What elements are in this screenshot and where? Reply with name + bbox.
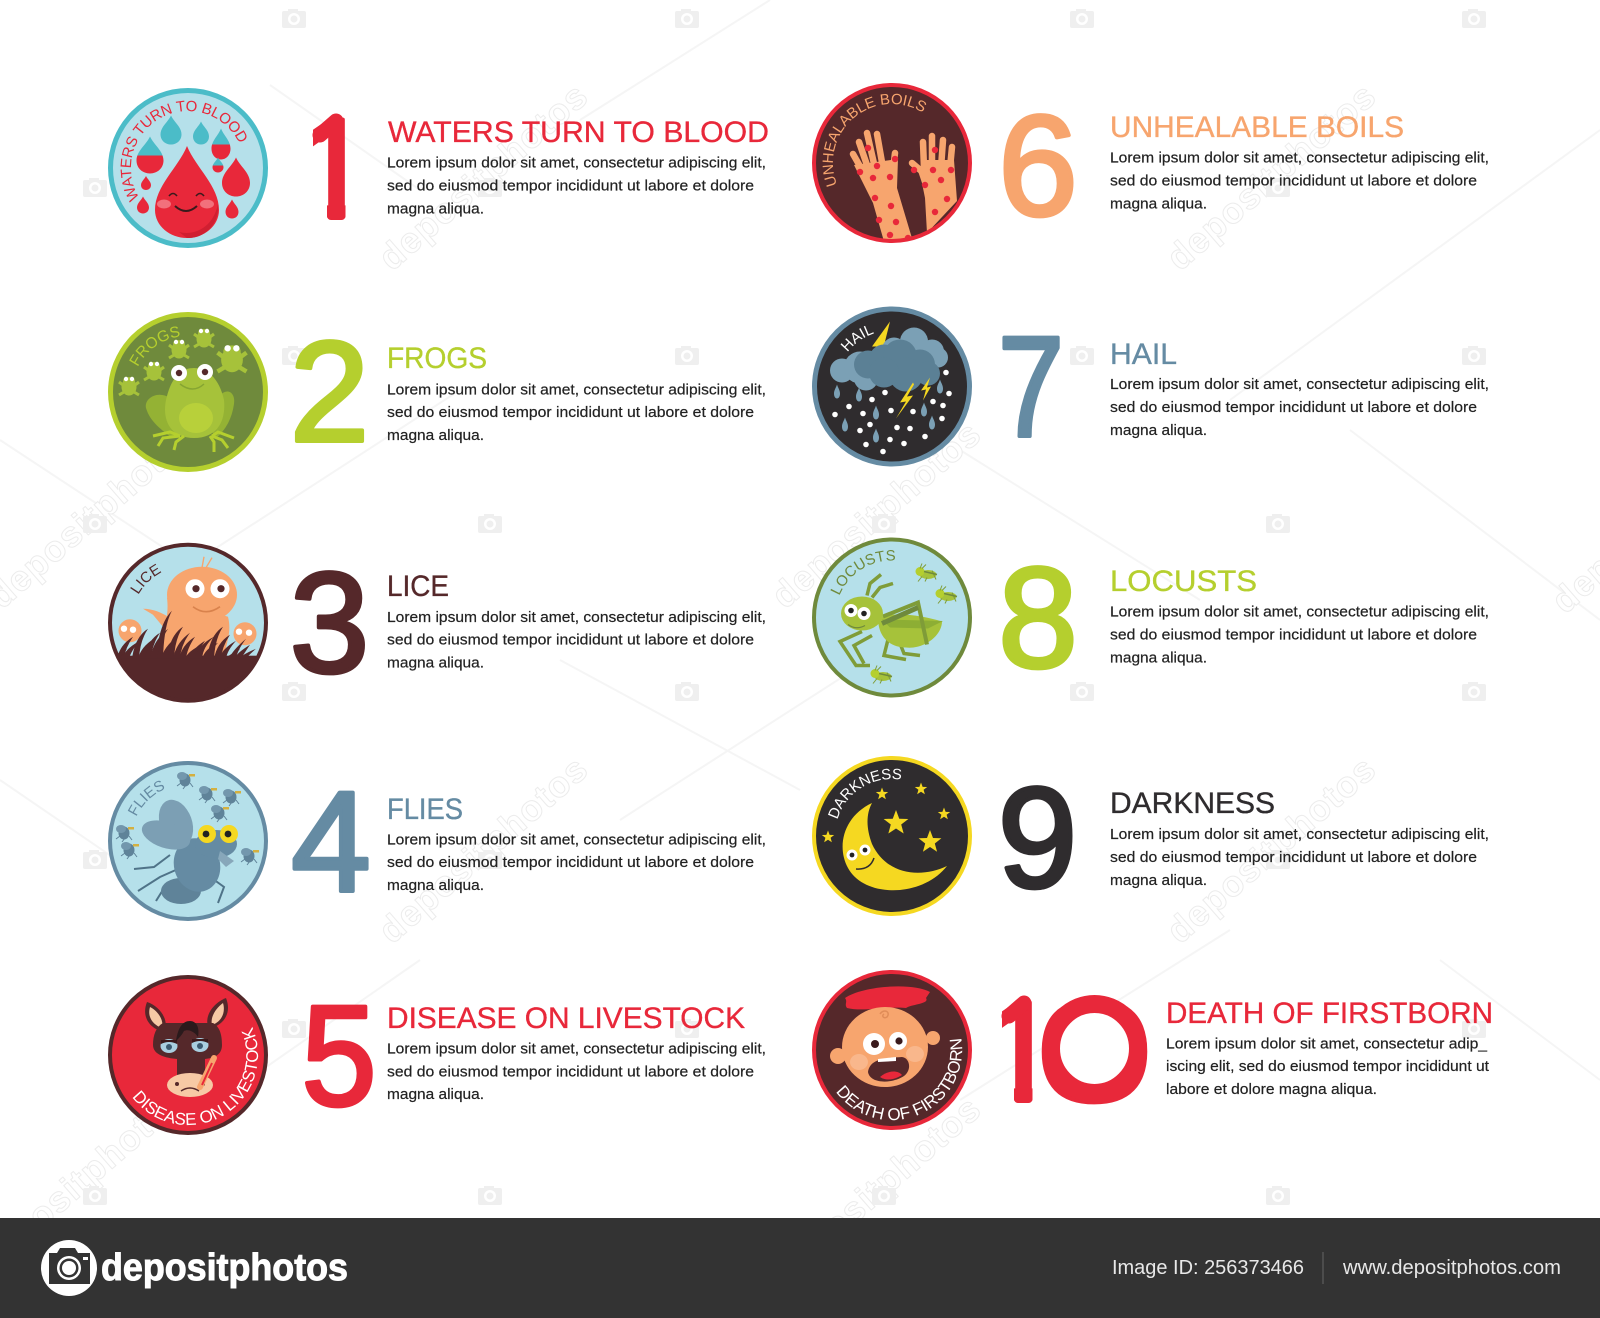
number 1: 1 — [294, 90, 374, 249]
number 3: 3 — [290, 544, 369, 703]
icon: crying baby badge: DEATH OF FIRSTBORN — [836, 1039, 962, 1120]
icon: lice badge — [108, 542, 268, 703]
body text: Lorem ipsum dolor sit amet, consectetur adipiscing elit, — [387, 156, 766, 172]
body text: sed do eiusmod tempor incididunt ut labore et dolore — [387, 179, 754, 195]
body text: magna aliqua. — [387, 1087, 484, 1103]
body text: magna aliqua. — [387, 656, 484, 672]
body text: sed do eiusmod tempor incididunt ut labore et dolore — [1110, 400, 1477, 416]
watermark pattern: depositphotos — [763, 413, 988, 616]
watermark pattern: depositphotos — [1158, 75, 1383, 278]
icon: flies badge — [108, 761, 268, 921]
body text — [387, 382, 766, 444]
panel: plague 8 locusts — [812, 538, 1489, 698]
body text: sed do eiusmod tempor incididunt ut labore et dolore — [1110, 628, 1477, 644]
body text: Lorem ipsum dolor sit amet, consectetur adipiscing elit, — [1110, 151, 1489, 167]
number 6: 6 — [998, 87, 1078, 246]
title: DEATH OF FIRSTBORN — [1166, 997, 1493, 1030]
body text: magna aliqua. — [387, 201, 484, 217]
panel: plague 6 unhealable boils — [812, 83, 1489, 246]
watermark pattern: depositphotos — [763, 1088, 988, 1291]
body text — [1110, 377, 1489, 439]
body text: magna aliqua. — [1110, 196, 1207, 212]
body text: Lorem ipsum dolor sit amet, consectetur adipiscing elit, — [387, 1042, 766, 1058]
panel: plague 2 frogs — [108, 312, 766, 472]
icon: frogs badge: FROGS — [129, 326, 180, 366]
body text: Lorem ipsum dolor sit amet, consectetur adipiscing elit, — [1110, 377, 1489, 393]
body text: labore et dolore magna aliqua. — [1166, 1082, 1377, 1098]
panel: plague 9 darkness — [812, 756, 1489, 918]
panel: plague 5 disease on livestock — [108, 975, 766, 1136]
number 8: 8 — [998, 539, 1078, 698]
body text: sed do eiusmod tempor incididunt ut labore et dolore — [1110, 850, 1477, 866]
title: HAIL — [1110, 338, 1177, 371]
number 9: 9 — [998, 759, 1077, 918]
icon: moon and stars badge: DARKNESS — [828, 768, 902, 819]
body text — [387, 610, 766, 672]
image id: Image ID: 256373466 — [1112, 1257, 1304, 1279]
panel: plague 1 waters turn to blood — [108, 88, 769, 248]
number 1 — [312, 114, 346, 220]
title: WATERS TURN TO BLOOD — [388, 116, 769, 149]
body text: magna aliqua. — [1110, 650, 1207, 666]
icon: blood drops badge: WATERS TURN TO BLOOD — [120, 100, 246, 203]
icon: crying baby badge — [812, 970, 972, 1130]
body text: sed do eiusmod tempor incididunt ut labore et dolore — [387, 855, 754, 871]
body text: sed do eiusmod tempor incididunt ut labore et dolore — [1110, 173, 1477, 189]
body text: magna aliqua. — [1110, 423, 1207, 439]
icon: locust badge: LOCUSTS — [830, 550, 895, 595]
logo wordmark: depositphotos — [101, 1247, 348, 1289]
body text: sed do eiusmod tempor incididunt ut labore et dolore — [387, 405, 754, 421]
body text: Lorem ipsum dolor sit amet, consectetur adipiscing elit, — [1110, 827, 1489, 843]
title: DISEASE ON LIVESTOCK — [387, 1002, 745, 1035]
title: FLIES — [387, 793, 463, 826]
title: LOCUSTS — [1110, 565, 1257, 598]
number 2: 2 — [290, 313, 369, 472]
body text — [387, 832, 766, 894]
body text: magna aliqua. — [1110, 873, 1207, 889]
icon: blood drops badge — [108, 88, 268, 248]
body text — [387, 156, 766, 217]
title: DARKNESS — [1110, 787, 1275, 820]
title: UNHEALABLE BOILS — [1110, 111, 1404, 144]
body text — [1166, 1036, 1489, 1098]
body text: iscing elit, sed do eiusmod tempor incididunt ut — [1166, 1059, 1489, 1075]
number 7: 7 — [998, 308, 1064, 467]
body text: Lorem ipsum dolor sit amet, consectetur adipiscing elit, — [387, 382, 766, 398]
body text: Lorem ipsum dolor sit amet, consectetur adipiscing elit, — [387, 610, 766, 626]
watermark pattern: depositphotos — [370, 75, 595, 278]
title: FROGS — [387, 342, 487, 375]
body text — [1110, 605, 1489, 666]
icon: moon and stars badge — [812, 756, 972, 916]
icon: sick horse badge: DISEASE ON LIVESTOCK — [132, 1026, 258, 1126]
icon: depositphotos camera logo — [41, 1240, 97, 1296]
icon: hail storm badge — [812, 306, 972, 466]
number 10: 1 — [981, 973, 1061, 1132]
icon: flies badge: FLIES — [128, 780, 164, 816]
body text — [387, 1042, 766, 1103]
body text — [1110, 151, 1489, 212]
title: LICE — [387, 570, 449, 603]
icon: frogs badge — [108, 312, 268, 472]
website url: www.depositphotos.com — [1342, 1257, 1561, 1279]
panel: plague 4 flies — [108, 761, 766, 922]
body text: sed do eiusmod tempor incididunt ut labore et dolore — [387, 1064, 754, 1080]
body text: magna aliqua. — [387, 878, 484, 894]
body text: Lorem ipsum dolor sit amet, consectetur adipiscing elit, — [1110, 605, 1489, 621]
icon: hail storm badge: HAIL — [840, 326, 874, 352]
number 4: 4 — [291, 763, 371, 922]
panel: plague 7 hail — [812, 306, 1489, 467]
body text: magna aliqua. — [387, 428, 484, 444]
icon: locust badge — [812, 538, 972, 698]
icon: lice badge: LICE — [130, 564, 162, 594]
number 5: 5 — [302, 977, 376, 1136]
watermark pattern: depositphotos — [1158, 748, 1383, 951]
panel: plague 3 lice — [108, 542, 766, 703]
body text: Lorem ipsum dolor sit amet, consectetur adipiscing elit, — [387, 832, 766, 848]
icon: boils hands badge — [812, 83, 972, 243]
number 10 — [1002, 995, 1148, 1104]
body text — [1110, 827, 1489, 889]
panel: plague 10 death of firstborn — [812, 970, 1493, 1132]
number 10: 0 — [1036, 973, 1152, 1132]
watermark pattern: depositphotos — [370, 748, 595, 951]
footer bar — [0, 1218, 1600, 1318]
body text: Lorem ipsum dolor sit amet, consectetur adip_ — [1166, 1036, 1488, 1052]
body text: sed do eiusmod tempor incididunt ut labore et dolore — [387, 633, 754, 649]
icon: sick horse badge — [108, 975, 268, 1135]
icon: boils hands badge: UNHEALABLE BOILS — [822, 94, 926, 187]
